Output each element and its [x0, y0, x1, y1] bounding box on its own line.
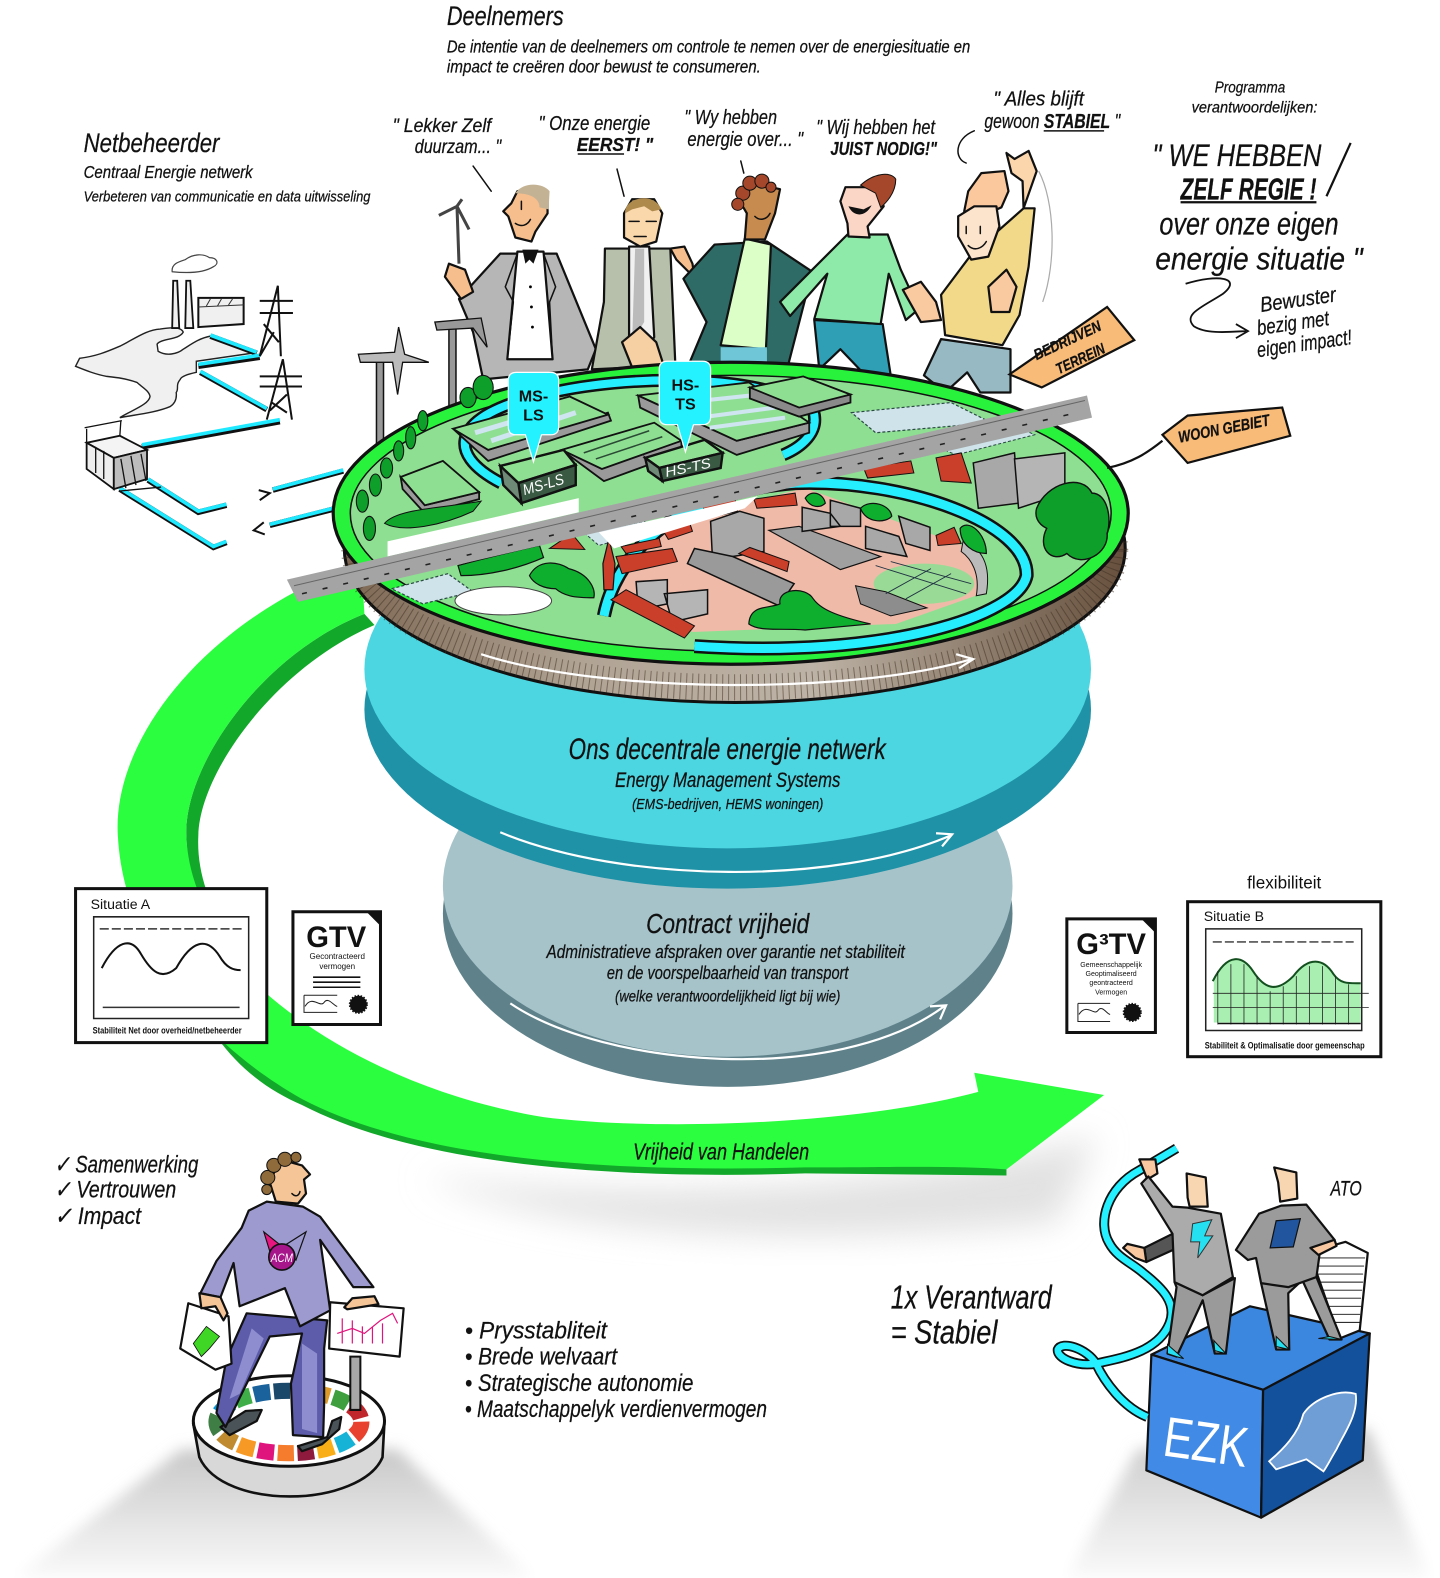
document: G3TV: G³TV [1076, 929, 1147, 961]
platform green rim [333, 362, 1128, 664]
rotation arrow on platform [481, 654, 973, 685]
bullet list: maatschappelijke waarden: • Prysstabliteit [465, 1317, 608, 1344]
programma verantwoordelijken statement: over onze eigen [1159, 206, 1339, 241]
pylons [260, 286, 302, 420]
building: south-west hall [401, 461, 479, 513]
quote: Alles blijft gewoon stabiel: gewoon STABIEL " [984, 111, 1121, 133]
disk heading: Ons decentrale energie netwerk text block: Energy Management Systems [615, 769, 841, 792]
chart stand [350, 1357, 360, 1410]
turbine in hand [439, 199, 469, 264]
checklist: ✓ Samenwerking [54, 1151, 199, 1178]
quote: Lekker zelf duurzaam [393, 116, 502, 158]
quote: Wy hebben energie over: " Wy hebben [684, 107, 777, 129]
green circular arrow: Vrijheid van Handelen [118, 579, 1104, 1175]
red roofs [550, 453, 971, 638]
disk heading: Contract vrijheid text block: en de voorspelbaarheid van transport [607, 963, 849, 983]
building: central hall [562, 423, 681, 481]
heading: Netbeheerder [84, 127, 371, 205]
label ATO: ATO [1329, 1178, 1362, 1201]
heading: Netbeheerder: Verbeteren van communicatie en data uitwisseling [84, 188, 371, 205]
energy management rotation arrow [500, 832, 952, 872]
church tower [603, 538, 615, 590]
shrubs [385, 501, 481, 528]
document: GTV [293, 912, 380, 1024]
disk: Contract vrijheid [443, 715, 1013, 1087]
east tree cluster [1036, 482, 1109, 560]
transformer: MS-LS [500, 450, 576, 503]
building: north-west hall [453, 397, 611, 461]
shoes [220, 1410, 341, 1451]
exchange arrow heads [254, 490, 270, 534]
panel: Situatie A chart [76, 889, 267, 1043]
man right [1236, 1167, 1342, 1350]
quote: Wy hebben energie over [684, 107, 804, 151]
heading: Netbeheerder: Netbeheerder [84, 127, 220, 158]
arrow band and head [118, 579, 1104, 1169]
pink neighbourhood ground [604, 488, 981, 632]
plant chimneys and hall [172, 281, 244, 328]
tag: Woon gebied: WOON GEBIET [1177, 411, 1272, 447]
arrow label: Vrijheid van Handelen [633, 1138, 809, 1164]
panel: Situatie B chart [1188, 902, 1381, 1057]
callout: HS-TS: HS- [672, 376, 699, 394]
panel: Situatie A chart: Situatie A [91, 896, 151, 912]
panel: Situatie B chart: Stabiliteit & Optimalisatie door gemeenschap [1205, 1041, 1365, 1051]
document: G3TV [1067, 919, 1155, 1033]
trees [458, 493, 986, 630]
arrow dark inner edge [186, 614, 1006, 1175]
document: G3TV: geontracteerd [1089, 980, 1133, 987]
tree row on west edge [356, 375, 493, 540]
curly arrow [1186, 278, 1248, 338]
solar fields [851, 403, 991, 433]
bullet list: maatschappelijke waarden: • Brede welvaart [465, 1344, 618, 1371]
quote: Onze energie eerst: EERST! " [577, 135, 654, 155]
panel: Situatie A chart: Stabiliteit Net door overheid/netbeheerder [93, 1026, 242, 1036]
disk heading: Contract vrijheid text block: Contract vrijheid [646, 907, 810, 939]
disk: Energy Management Systems [364, 490, 1091, 889]
village blocks [636, 500, 988, 622]
callout: MS-LS: MS- [519, 388, 548, 406]
quote: Onze energie eerst [538, 113, 654, 155]
illustration: central grid with power plant and pylons [76, 255, 343, 547]
document: G3TV: Geoptimaliseerd [1086, 971, 1137, 978]
document: GTV: Gecontracteerd [309, 952, 365, 961]
disk heading: Contract vrijheid text block [546, 907, 906, 1005]
head [270, 1159, 310, 1204]
speech tick [473, 166, 491, 191]
quote: Alles blijft gewoon stabiel [984, 89, 1121, 133]
heading: Deelnemers: Deelnemers [447, 0, 564, 31]
cyan cable [1058, 1148, 1177, 1417]
checklist: ✓ Impact [54, 1203, 142, 1230]
tag: Bedrijven terrein: BEDRIJVEN [1031, 317, 1105, 364]
cube: EZK [1160, 1405, 1252, 1479]
heading: Deelnemers: impact te creëren door bewust te consumeren. [447, 57, 761, 76]
person: green sweater and jeans [780, 174, 919, 375]
callout: MS-LS [508, 372, 559, 462]
quote: Onze energie eerst: " Onze energie [538, 113, 650, 135]
cube [1146, 1306, 1370, 1518]
person: dark teal jacket [683, 161, 812, 365]
checklist [54, 1151, 199, 1230]
bullet list: maatschappelijke waarden: • Strategische autonomie [465, 1370, 693, 1397]
quote: Alles blijft gewoon stabiel: " Alles blijft [993, 89, 1085, 111]
tag: Woon gebied [1107, 408, 1290, 468]
bullet list: maatschappelijke waarden [465, 1317, 767, 1423]
river in business park [465, 380, 815, 483]
document: G3TV: Vermogen [1095, 989, 1127, 996]
platform side [344, 394, 1125, 702]
tag: Bedrijven terrein: TERREIN [1053, 340, 1109, 378]
small wind turbine on platform [435, 318, 487, 408]
smoke shaped land [76, 328, 252, 418]
platform surface [350, 375, 1111, 651]
transformer: MS-LS: MS-LS [521, 471, 566, 499]
ground and arrow shadows [15, 1137, 1429, 1578]
figure: ACM regulator on SDG disk [180, 1152, 404, 1496]
transformer: HS-TS [645, 440, 723, 481]
map of the Netherlands [1269, 1393, 1356, 1471]
person: grey-green coat with glasses [592, 169, 694, 369]
programma verantwoordelijken statement [1152, 79, 1364, 362]
trousers [216, 1313, 327, 1437]
park on pink ground [874, 564, 974, 604]
quote: Wij hebben het juist nodig [816, 117, 937, 159]
building: north hall [638, 382, 809, 455]
flexibility area [1214, 959, 1361, 1022]
SDG disk [193, 1376, 385, 1496]
quote: Wij hebben het juist nodig: JUIST NODIG!" [830, 139, 937, 159]
panel: Situatie B chart: Situatie B [1204, 908, 1264, 924]
disk heading: Ons decentrale energie netwerk text block: Ons decentrale energie netwerk [569, 734, 887, 766]
callout: HS-TS: TS [675, 396, 696, 414]
programma verantwoordelijken statement: " WE HEBBEN [1152, 138, 1322, 173]
programma verantwoordelijken statement: Programma [1215, 79, 1285, 97]
quote: Wij hebben het juist nodig: " Wij hebben het [816, 117, 936, 139]
paper in left hand [180, 1293, 232, 1370]
plant cloud [172, 255, 217, 272]
cyan cables [120, 335, 343, 547]
document: GTV: GTV [306, 922, 367, 954]
jacket [200, 1202, 373, 1326]
programma verantwoordelijken statement: bezig met [1256, 307, 1331, 340]
programma verantwoordelijken statement: energie situatie " [1155, 242, 1364, 277]
highway [287, 396, 1092, 602]
chart board in right hand [329, 1296, 404, 1357]
disk heading: Ons decentrale energie netwerk text block: (EMS-bedrijven, HEMS woningen) [632, 796, 823, 813]
tag: Bedrijven terrein [1009, 307, 1134, 387]
platform side hatching [354, 414, 1115, 687]
programma verantwoordelijken statement: ZELF REGIE ! [1180, 173, 1316, 206]
document: G3TV: Gemeenschappelijk [1080, 962, 1142, 969]
man left [1123, 1159, 1235, 1359]
quote: Lekker zelf duurzaam: duurzam... " [415, 137, 502, 158]
person: grey suit with wind turbine [439, 166, 596, 379]
contract vrijheid rotation arrow [510, 1003, 946, 1059]
document: GTV: vermogen [319, 962, 355, 971]
person: yellow sweater with second head [903, 131, 1052, 392]
checklist: ✓ Vertrouwen [54, 1177, 176, 1204]
figure: EZK cube with two men [1058, 1148, 1370, 1518]
disk heading: Contract vrijheid text block: (welke verantwoordelijkheid ligt bij wie) [615, 987, 840, 1005]
statement: 1x verantwoord = stabiel: = Stabiel [891, 1315, 999, 1352]
building: east hall [750, 376, 850, 417]
label: flexibiliteit: flexibiliteit [1247, 874, 1322, 893]
callout: MS-LS: LS [523, 407, 544, 425]
bullet list: maatschappelijke waarden: • Maatschappelyk verdienvermogen [465, 1396, 767, 1423]
statement: 1x verantwoord = stabiel [891, 1279, 1053, 1352]
transformer: HS-TS: HS-TS [664, 455, 713, 480]
quote: Wy hebben energie over: energie over... " [687, 129, 804, 151]
disk heading: Contract vrijheid text block: Administratieve afspraken over garantie net stabiliteit [546, 942, 906, 962]
statement: 1x verantwoord = stabiel: 1x Verantward [891, 1279, 1053, 1316]
disk heading: Ons decentrale energie netwerk text block [569, 734, 887, 813]
heading: Deelnemers: De intentie van de deelnemers om controle te nemen over de energiesituatie en [447, 37, 970, 56]
river around village [604, 483, 1027, 648]
platform disk with neighbourhood map [287, 362, 1128, 702]
programma verantwoordelijken statement: verantwoordelijken: [1192, 99, 1317, 117]
substation [85, 421, 161, 491]
callout: HS-TS [659, 361, 711, 452]
quote: Lekker zelf duurzaam: " Lekker Zelf [393, 116, 493, 137]
ACM badge: ACM [270, 1251, 294, 1265]
upper right offices [973, 453, 1065, 508]
programma verantwoordelijken statement: Bewuster [1259, 283, 1338, 317]
wind turbine left of platform [358, 327, 429, 473]
paper stack [1309, 1242, 1368, 1338]
heading: Deelnemers [447, 0, 970, 76]
programma verantwoordelijken statement: eigen impact! [1256, 326, 1354, 362]
ACM badge [264, 1232, 306, 1270]
heading: Netbeheerder: Centraal Energie netwerk [84, 163, 254, 182]
oval field [455, 587, 552, 615]
